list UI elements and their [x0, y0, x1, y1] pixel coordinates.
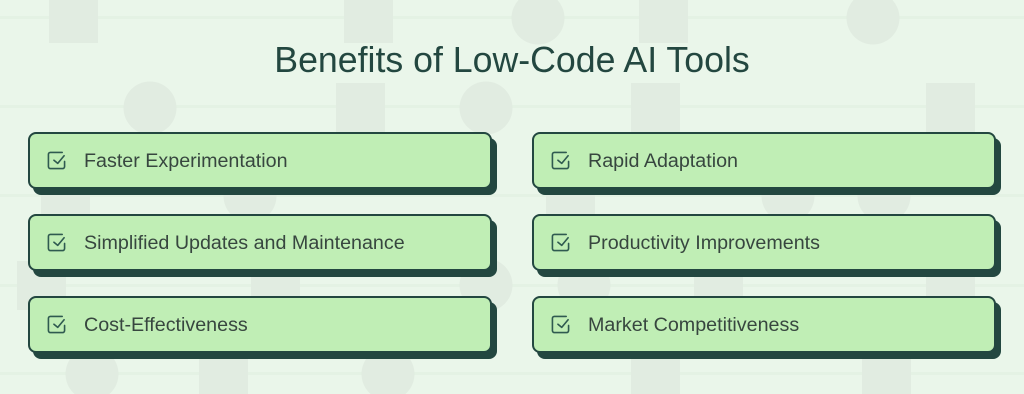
icon: checkbox	[552, 152, 570, 170]
card: Simplified Updates and Maintenance	[28, 214, 492, 271]
card: Cost-Effectiveness: Cost-Effectiveness	[84, 314, 248, 336]
card: Productivity Improvements	[532, 214, 996, 271]
card: Productivity Improvements: Productivity Improvements	[588, 232, 820, 254]
icon: checkbox	[48, 234, 66, 252]
card: Rapid Adaptation: Rapid Adaptation	[588, 150, 738, 172]
title: Benefits of Low-Code AI Tools	[274, 40, 750, 80]
icon: checkbox	[552, 234, 570, 252]
icon: checkbox	[48, 316, 66, 334]
card: Simplified Updates and Maintenance: Simplified Updates and Maintenance	[84, 232, 405, 254]
card: Market Competitiveness: Market Competitiveness	[588, 314, 799, 336]
card: Rapid Adaptation	[532, 132, 996, 189]
card: Cost-Effectiveness	[28, 296, 492, 353]
card: Faster Experimentation: Faster Experimentation	[84, 150, 288, 172]
icon: checkbox	[48, 152, 66, 170]
icon: checkbox	[552, 316, 570, 334]
card: Faster Experimentation	[28, 132, 492, 189]
card: Market Competitiveness	[532, 296, 996, 353]
